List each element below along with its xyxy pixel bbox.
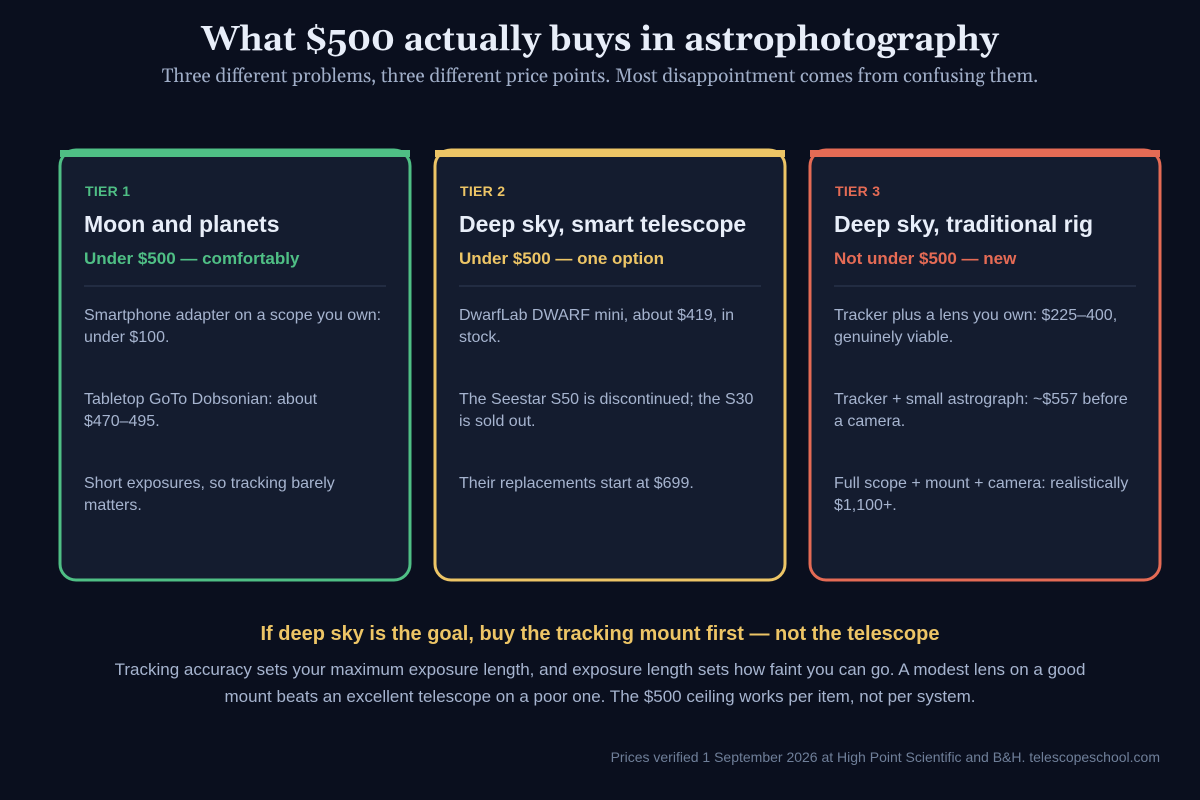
tier name: Moon and planets bbox=[84, 211, 280, 237]
verdict: Not under $500 — new bbox=[834, 249, 1016, 268]
point 3: Full scope + mount + camera: realistically bbox=[834, 475, 1128, 492]
point 2: The Seestar S50 is discontinued; the S30 bbox=[459, 391, 753, 408]
point 1 bbox=[84, 307, 381, 346]
panel: tier 1 bbox=[58, 148, 412, 582]
subtitle: Three different problems, three different price points. Most disappointment comes from confusing them. bbox=[162, 65, 1038, 89]
callout text: mount beats an excellent telescope on a poor one. The $500 ceiling works per item, not per system. bbox=[225, 687, 975, 706]
point 2 bbox=[84, 391, 317, 430]
point 3: Short exposures, so tracking barely bbox=[84, 475, 335, 492]
title: What $500 actually buys in astrophotography bbox=[201, 18, 999, 62]
point 2: $470–495. bbox=[84, 413, 160, 430]
point 1: DwarfLab DWARF mini, about $419, in bbox=[459, 307, 734, 324]
point 2: is sold out. bbox=[459, 413, 535, 430]
point 3: $1,100+. bbox=[834, 497, 897, 514]
point 1 bbox=[834, 307, 1117, 346]
tier label: TIER 3 bbox=[835, 183, 880, 199]
point 1: stock. bbox=[459, 329, 501, 346]
point 2 bbox=[834, 391, 1128, 430]
panel: tier 3 bbox=[808, 148, 1162, 582]
point 1: Smartphone adapter on a scope you own: bbox=[84, 307, 381, 324]
tier name: Deep sky, traditional rig bbox=[834, 211, 1093, 237]
point 1 bbox=[459, 307, 734, 346]
point 1: Tracker plus a lens you own: $225–400, bbox=[834, 307, 1117, 324]
point 1: under $100. bbox=[84, 329, 169, 346]
point 3 bbox=[834, 475, 1128, 514]
callout text: Tracking accuracy sets your maximum exposure length, and exposure length sets how faint you can go. A modest lens on a good bbox=[115, 660, 1085, 679]
callout heading: If deep sky is the goal, buy the tracking mount first — not the telescope bbox=[260, 623, 940, 645]
verdict: Under $500 — one option bbox=[459, 249, 664, 268]
point 2 bbox=[459, 391, 753, 430]
tier label: TIER 1 bbox=[85, 183, 130, 199]
point 2: a camera. bbox=[834, 413, 905, 430]
point 2: Tabletop GoTo Dobsonian: about bbox=[84, 391, 317, 408]
point 2: Tracker + small astrograph: ~$557 before bbox=[834, 391, 1128, 408]
point 3: matters. bbox=[84, 497, 142, 514]
source note: Prices verified 1 September 2026 at High Point Scientific and B&H. telescopeschool.com bbox=[611, 749, 1160, 765]
panel: tier 2 bbox=[434, 148, 786, 582]
callout text bbox=[115, 660, 1085, 706]
tier label: TIER 2 bbox=[460, 183, 505, 199]
tier name: Deep sky, smart telescope bbox=[459, 211, 746, 237]
verdict: Under $500 — comfortably bbox=[84, 249, 299, 268]
point 3: Their replacements start at $699. bbox=[459, 475, 694, 492]
point 3 bbox=[84, 475, 335, 514]
point 1: genuinely viable. bbox=[834, 329, 953, 346]
